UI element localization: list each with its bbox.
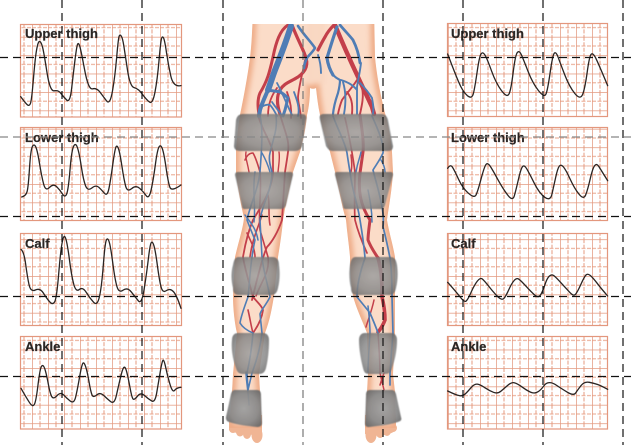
right leg arteries (318, 25, 385, 390)
panel: left upper thigh chart (20, 24, 182, 117)
calf cuff left (232, 257, 280, 295)
left leg veins (240, 26, 315, 405)
top crop mask (240, 0, 390, 24)
label: Upper thigh: Upper thigh (451, 26, 524, 41)
panel: right upper thigh chart (448, 24, 608, 116)
foot cuff left (226, 390, 262, 427)
thigh cuff left lower (235, 172, 293, 209)
label: Ankle: Ankle (451, 339, 486, 354)
ankle cuff left (232, 333, 269, 374)
ankle cuff right (359, 333, 397, 374)
waveform: left ankle (21, 360, 181, 406)
label: Calf: Calf (25, 236, 50, 251)
waveform: right ankle (448, 382, 608, 396)
panel: right calf chart (448, 234, 608, 326)
waveform: left calf (21, 236, 181, 308)
pelvis centre blend (307, 10, 325, 84)
panel: right lower thigh chart (448, 128, 608, 220)
right leg skin (316, 8, 396, 428)
label: Calf: Calf (451, 236, 476, 251)
waveform: left upper thigh (21, 35, 181, 105)
panel: left ankle chart (20, 336, 182, 429)
thigh cuff right lower (335, 172, 393, 209)
panel: left lower thigh chart (20, 128, 182, 220)
left leg skin (229, 8, 316, 428)
label: Lower thigh: Lower thigh (25, 130, 99, 145)
foot cuff right (365, 390, 401, 427)
waveform: right lower thigh (448, 164, 608, 199)
right leg veins (318, 25, 393, 385)
panel: left calf chart (20, 234, 182, 326)
waveform: right calf (448, 274, 608, 301)
label: Lower thigh: Lower thigh (451, 130, 525, 145)
calf cuff right (349, 257, 398, 295)
left leg arteries (243, 25, 307, 333)
waveform: left lower thigh (22, 145, 181, 197)
label: Ankle: Ankle (25, 339, 60, 354)
left foot and toes (229, 415, 262, 443)
label: Upper thigh: Upper thigh (25, 26, 98, 41)
waveform: right upper thigh (448, 52, 608, 97)
thigh cuff right upper (320, 114, 393, 151)
illustration: legs with vessels and cuffs (226, 0, 401, 443)
thigh cuff left upper (234, 114, 306, 151)
panel: right ankle chart (448, 336, 608, 429)
right foot and toes (365, 415, 397, 443)
